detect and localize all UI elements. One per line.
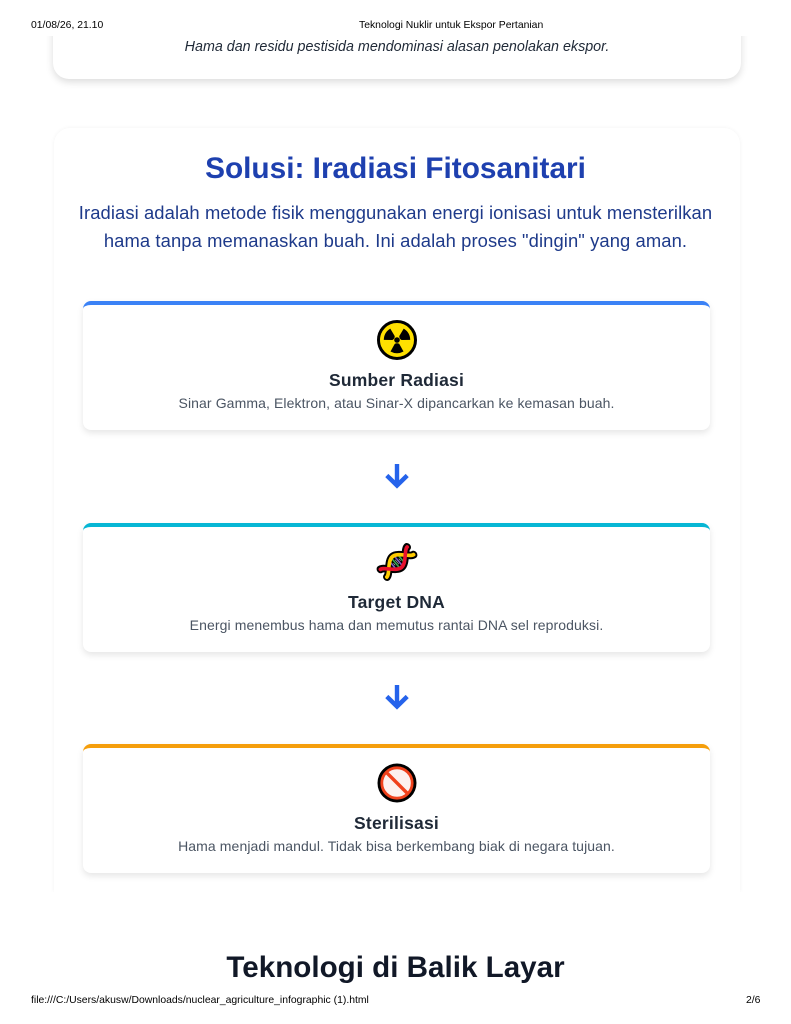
print footer page number: 2/6: [746, 995, 760, 1006]
icon: DNA: [376, 543, 418, 581]
heading: technology: Teknologi di Balik Layar: [226, 951, 565, 984]
solution description: Iradiasi adalah metode fisik menggunakan energi ionisasi untuk mensterilkan: [79, 202, 712, 223]
step title: Target DNA: [348, 592, 445, 612]
step card: sterilization: [83, 744, 710, 873]
card caption: Hama dan residu pestisida mendominasi alasan penolakan ekspor.: [185, 39, 609, 55]
step text: Hama menjadi mandul. Tidak bisa berkembang biak di negara tujuan.: [178, 838, 615, 854]
icon: radioactive: [377, 320, 417, 360]
step title: Sterilisasi: [354, 813, 439, 833]
solution description: hama tanpa memanaskan buah. Ini adalah proses "dingin" yang aman.: [104, 230, 687, 251]
heading: solution: Solusi: Iradiasi Fitosanitari: [205, 152, 586, 185]
panel: previous card: [50, 36, 744, 84]
print footer file path: file:///C:/Users/akusw/Downloads/nuclear_agriculture_infographic (1).html: [31, 995, 369, 1006]
icon: prohibited: [378, 764, 416, 802]
solution description: [79, 202, 712, 251]
step title: Sumber Radiasi: [329, 370, 464, 390]
arrow: down 2: [385, 685, 409, 710]
step text: Energi menembus hama dan memutus rantai DNA sel reproduksi.: [190, 617, 603, 633]
print header date: 01/08/26, 21.10: [31, 20, 103, 31]
step card: target DNA: [83, 523, 710, 652]
step card: radiation source: [83, 301, 710, 430]
panel: solution: [54, 128, 740, 892]
step text: Sinar Gamma, Elektron, atau Sinar-X dipancarkan ke kemasan buah.: [179, 395, 614, 411]
arrow: down 1: [385, 464, 409, 488]
print header title: Teknologi Nuklir untuk Ekspor Pertanian: [359, 20, 543, 31]
